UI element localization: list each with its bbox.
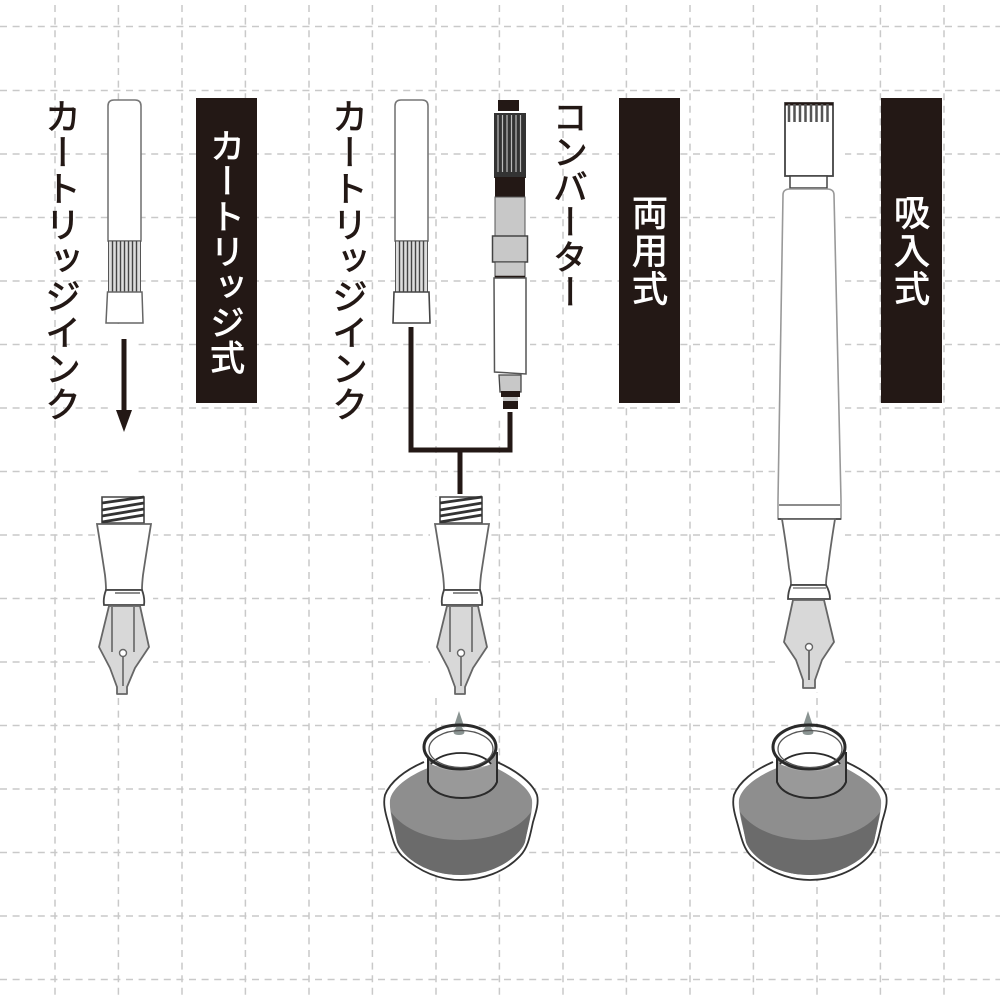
ink bottle 1 (384, 711, 538, 880)
panel: cartridge type (196, 98, 257, 403)
converter (492, 100, 528, 409)
panel: dual type (619, 98, 680, 403)
connector lines (411, 327, 510, 494)
panel: piston fill type (881, 98, 942, 403)
piston filler pen (778, 103, 841, 688)
arrow: cartridge into nib (116, 339, 132, 432)
label: cartridge ink (left): カートリッジインク (40, 98, 81, 422)
panel heading: cartridge type: カートリッジ式 (205, 128, 244, 375)
label: cartridge ink (middle): カートリッジインク (327, 98, 368, 422)
nib section 2 (435, 497, 489, 694)
cartridge 2 (393, 100, 430, 323)
panel heading: dual type: 両用式 (627, 194, 668, 308)
label: converter: コンバーター (548, 99, 587, 309)
white masks behind pens (95, 100, 845, 697)
panel heading: piston fill type: 吸入式 (889, 194, 930, 308)
cartridge 1 (106, 100, 143, 323)
nib section 1 (97, 497, 151, 694)
ink bottle 2 (733, 711, 887, 880)
